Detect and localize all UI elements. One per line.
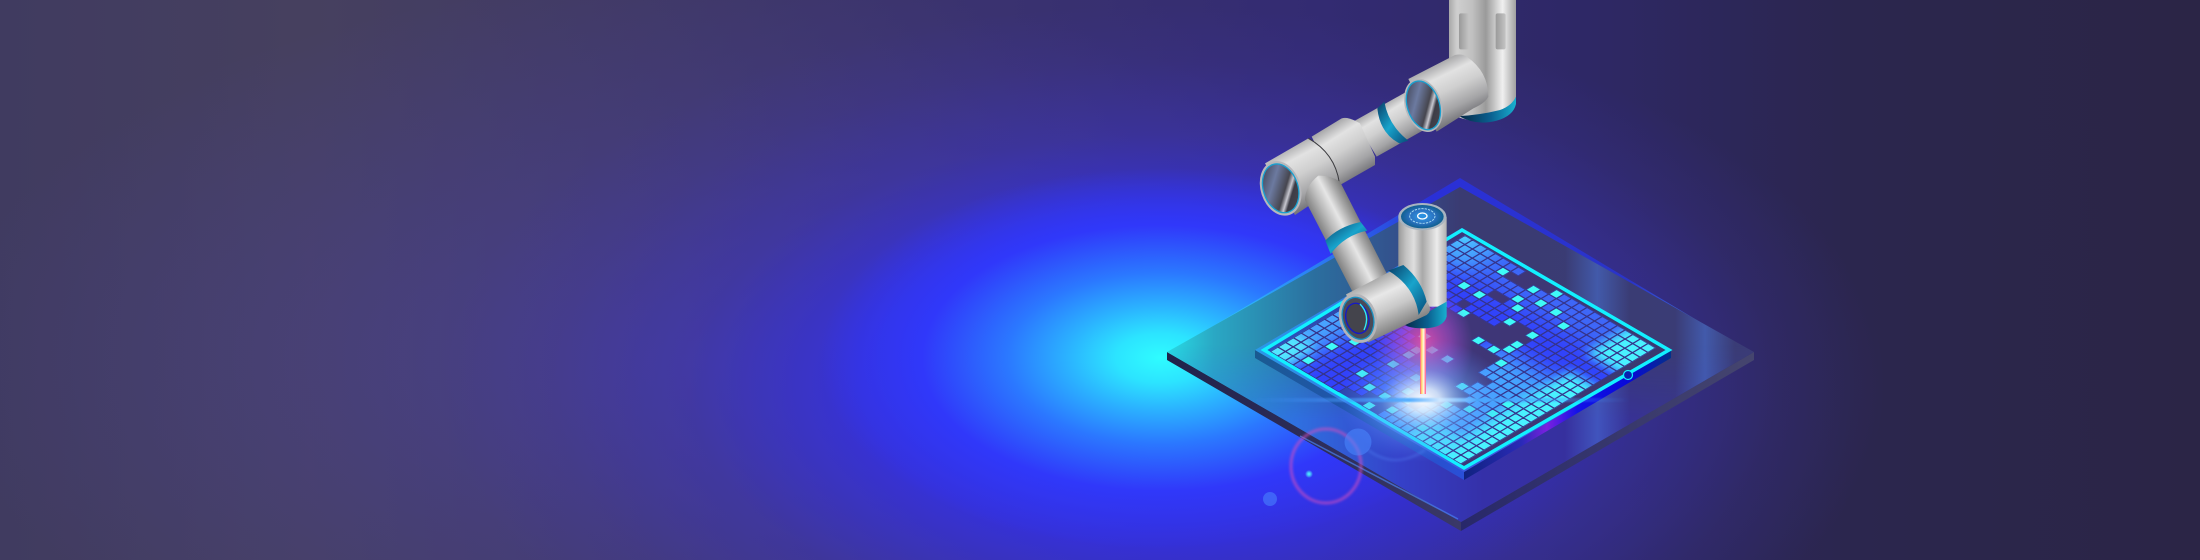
upper elbow	[1397, 54, 1488, 137]
platform right side face	[1461, 352, 1754, 531]
grid lines	[1270, 235, 1656, 464]
chip top face	[1255, 228, 1671, 472]
platform: glass base plate	[1167, 178, 1754, 531]
lower elbow teal ring	[1388, 265, 1427, 315]
joint seam	[1308, 138, 1339, 183]
laser glow	[1373, 283, 1473, 407]
lower elbow end face	[1333, 289, 1383, 348]
microchip	[1255, 228, 1672, 480]
lens flare burst	[1339, 338, 1507, 462]
platform light bands	[1570, 250, 1730, 456]
lens disc	[1344, 428, 1372, 456]
tube teal ring	[1377, 102, 1408, 143]
faint lens arc	[1368, 450, 1425, 460]
platform inner light line	[1300, 436, 1458, 519]
horizontal flare streak	[1250, 398, 1630, 402]
connector tube	[1355, 92, 1427, 157]
chip right side	[1464, 350, 1671, 480]
column teal base	[1460, 97, 1516, 123]
lower arm teal ring	[1325, 222, 1367, 254]
platform top face	[1167, 187, 1754, 522]
shoulder joint	[1253, 118, 1375, 221]
chip pixel grid	[1270, 235, 1656, 464]
tool cylinder	[1398, 203, 1447, 328]
column slots	[1459, 13, 1469, 49]
laser beam	[1420, 328, 1426, 394]
lower elbow	[1333, 265, 1430, 348]
platform left side face	[1167, 352, 1461, 531]
lens ring	[1291, 429, 1361, 503]
lens spark	[1305, 470, 1313, 478]
shoulder end face	[1253, 156, 1308, 221]
tool teal cap	[1405, 302, 1447, 328]
robot arm	[1253, 0, 1516, 348]
upper column	[1449, 0, 1516, 123]
small lens disc	[1263, 492, 1277, 506]
platform lower shading	[1175, 356, 1694, 522]
platform outer glow edge	[1175, 178, 1745, 352]
illustration: robot arm over microchip	[1167, 0, 1754, 531]
tool top disc	[1398, 203, 1446, 230]
chip bordered surface	[1264, 230, 1669, 468]
bright cyan cells	[1302, 268, 1570, 431]
chip notch	[1624, 370, 1632, 380]
chip left side	[1255, 350, 1464, 480]
upper elbow end face	[1397, 74, 1449, 137]
lower arm	[1305, 176, 1393, 293]
